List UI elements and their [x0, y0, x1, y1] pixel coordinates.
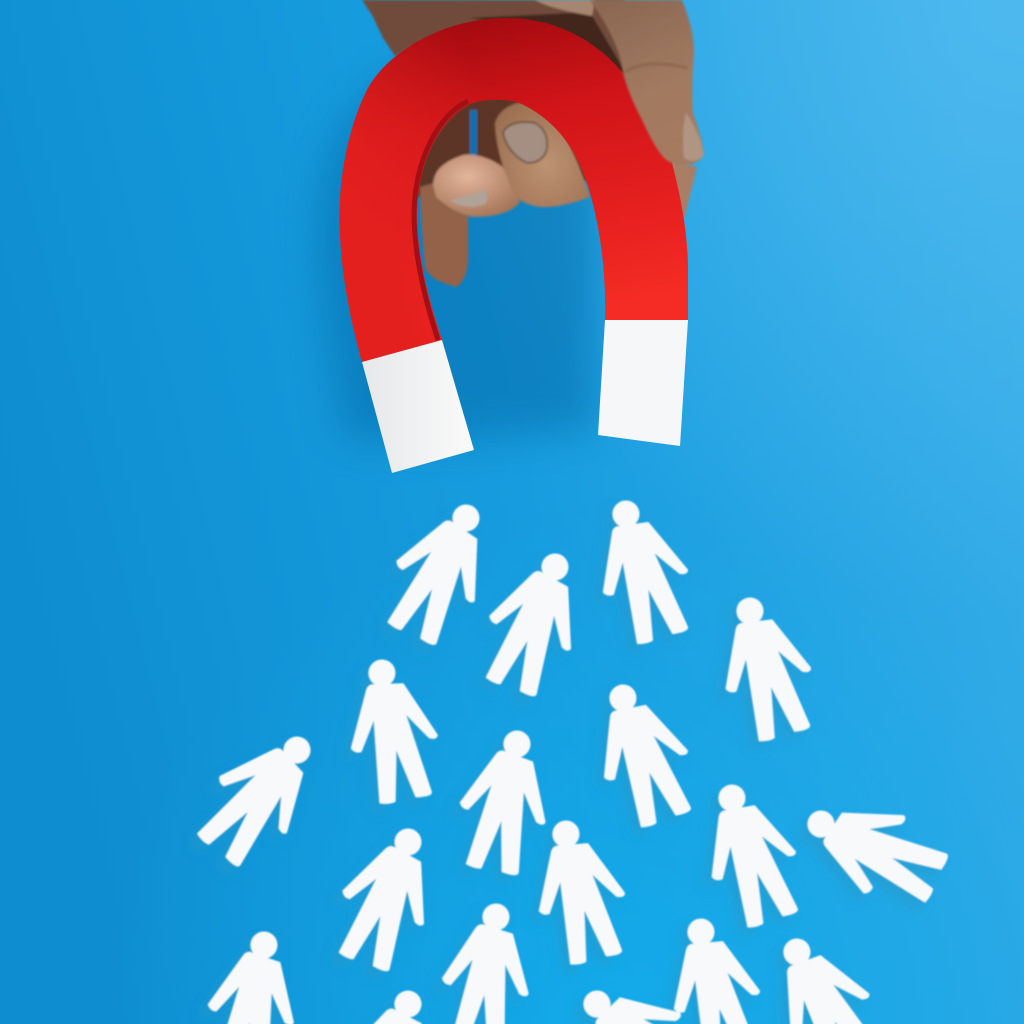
figure 12: [537, 819, 628, 966]
thumb crease: [625, 64, 688, 72]
figure 14: [422, 895, 557, 1024]
light knuckle patch: [535, 0, 595, 16]
figure 11: [313, 818, 465, 982]
right palm fragment: [667, 160, 697, 220]
magnet inner wall shading: [414, 101, 468, 340]
thumb nail: [683, 113, 704, 161]
front finger: [495, 102, 590, 207]
magnet shadow: [318, 58, 600, 440]
figure 1: [363, 493, 520, 655]
hand: fingers behind magnet: [362, 0, 697, 287]
figure 5: [347, 657, 444, 808]
figure 18: [571, 957, 722, 1024]
figure 8: [600, 681, 691, 828]
figure 7: [437, 722, 577, 887]
middle finger: [433, 155, 520, 217]
figure 10: [796, 770, 958, 927]
palm and upper hand: [362, 0, 640, 80]
figure 16: [773, 926, 884, 1024]
figure 3: [604, 500, 687, 643]
magnet red body: [340, 18, 688, 362]
middle finger nail: [450, 189, 488, 207]
figure 9: [710, 782, 798, 928]
magnet white left pole: [362, 340, 474, 473]
figure 17: [316, 980, 466, 1024]
shadowed palm under thumb: [470, 12, 630, 80]
figure 4: [726, 597, 811, 741]
blue gap between fingers: [470, 110, 477, 156]
magnet: [340, 18, 688, 473]
crowd of figures: [179, 493, 958, 1024]
front finger nail: [503, 122, 547, 163]
figure 6: [179, 724, 343, 874]
magnet left side tint: [340, 18, 507, 362]
lower finger: [420, 180, 468, 287]
figure 13: [186, 923, 325, 1024]
inner hand shadow: [412, 90, 590, 200]
magnet white right pole: [598, 320, 688, 446]
figure 15: [672, 917, 763, 1024]
figure 2: [460, 543, 612, 707]
hand: thumb over magnet: [590, 0, 704, 165]
